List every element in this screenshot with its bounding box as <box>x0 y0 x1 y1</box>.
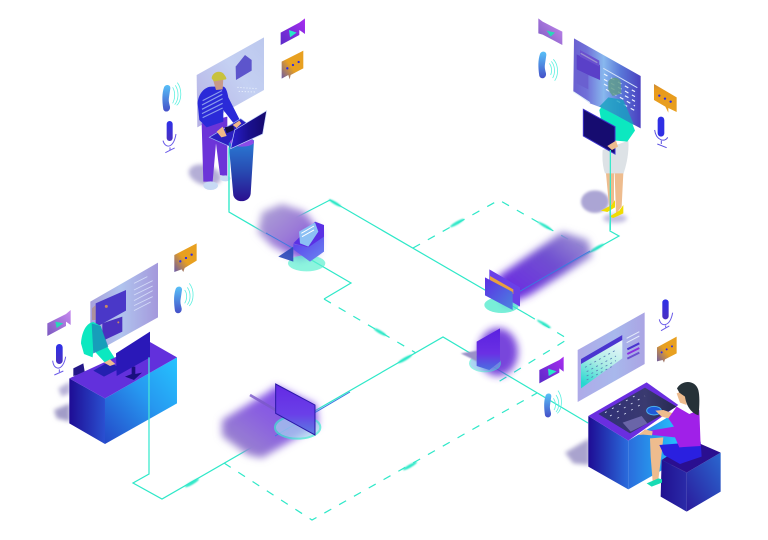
laptop base <box>209 119 254 147</box>
panel text lines <box>581 53 597 63</box>
torso <box>599 97 635 142</box>
blouse <box>651 407 701 447</box>
data line <box>147 357 151 450</box>
torso <box>81 322 116 363</box>
floor shadow <box>565 438 589 465</box>
panel text lines <box>134 277 153 311</box>
shoe <box>647 478 662 487</box>
torso under panel <box>599 97 634 125</box>
microphone icon <box>56 344 63 364</box>
keys <box>605 394 645 418</box>
skirt <box>602 141 629 174</box>
skirt <box>659 442 702 464</box>
base disc <box>470 355 500 372</box>
head <box>92 305 96 320</box>
torso <box>198 87 241 127</box>
station: woman with tablet <box>538 18 677 230</box>
video icon <box>281 18 305 45</box>
hand <box>104 359 115 366</box>
desk top <box>588 382 678 441</box>
station: worker at desk with monitor <box>47 243 197 450</box>
laptop screen <box>231 111 267 149</box>
control surface <box>598 388 677 433</box>
display panel <box>197 37 264 127</box>
data line <box>609 150 612 230</box>
torso under panel <box>92 323 108 353</box>
face <box>677 390 687 405</box>
floor shadow <box>58 382 70 397</box>
near hand <box>638 429 653 435</box>
chat icon <box>174 243 197 272</box>
microphone icon <box>167 121 173 141</box>
monitor screen <box>116 332 150 376</box>
leg <box>650 437 663 482</box>
display panel <box>578 312 645 402</box>
shadow stem <box>461 351 477 362</box>
station: woman at control desk <box>539 299 721 512</box>
house icon <box>236 55 252 80</box>
phone icon <box>538 52 546 78</box>
legs <box>606 173 623 214</box>
phone icon <box>162 85 170 112</box>
node: small screen <box>461 328 500 372</box>
podium <box>229 138 254 201</box>
node: monitor <box>250 384 320 439</box>
panel dots <box>237 87 257 92</box>
panel cards <box>96 290 126 327</box>
shirt stripes <box>202 91 223 118</box>
phone icon <box>174 287 182 313</box>
wedge <box>278 247 293 262</box>
podium top <box>230 137 254 147</box>
shoes <box>601 200 623 218</box>
head <box>608 78 621 96</box>
desk left face <box>588 416 628 489</box>
back sheet <box>489 269 520 307</box>
seat left face <box>661 460 687 512</box>
microphone icon <box>662 299 669 319</box>
panel header <box>581 335 622 364</box>
seat right face <box>687 453 721 512</box>
connector lines <box>133 150 619 520</box>
node: folder <box>484 269 520 313</box>
box body <box>293 237 324 262</box>
back flap <box>293 222 324 252</box>
microphone icon <box>658 117 664 137</box>
chat icon <box>282 51 303 79</box>
dial <box>647 406 661 415</box>
motion trail: monitor <box>222 386 318 458</box>
panel side list <box>627 332 639 343</box>
data pulse highlights <box>184 198 605 488</box>
shoes <box>203 181 218 190</box>
chat icon <box>654 84 677 113</box>
motion trail: folder <box>497 232 592 306</box>
station: presenter at podium <box>162 18 305 210</box>
display panel <box>90 263 158 355</box>
node: mailbox <box>278 222 325 271</box>
keyboard <box>93 361 120 377</box>
chat icon <box>657 337 677 363</box>
data line <box>227 147 231 210</box>
floor shadow <box>186 161 224 189</box>
desk top <box>69 342 177 398</box>
touchpad <box>623 416 647 432</box>
video icon <box>47 310 71 336</box>
floor shadow <box>581 190 609 213</box>
seat top <box>662 440 721 473</box>
base disc <box>484 297 519 313</box>
panel cards <box>577 54 600 80</box>
motion trail: mail <box>258 204 320 260</box>
head <box>213 78 223 90</box>
base disc <box>288 255 325 271</box>
far arm <box>655 410 675 420</box>
hair <box>677 382 699 415</box>
desk right face <box>105 357 177 444</box>
chair <box>73 363 85 376</box>
video icon <box>538 18 562 45</box>
stem shadow <box>250 395 276 410</box>
display panel <box>573 38 641 128</box>
panel data rows <box>585 350 616 380</box>
legs <box>202 117 227 182</box>
orange paper <box>490 276 513 294</box>
folder front <box>485 277 513 310</box>
desk right face <box>628 410 680 489</box>
desk left face <box>69 378 105 444</box>
video icon <box>539 357 564 383</box>
screen <box>477 328 500 370</box>
hair <box>212 72 226 81</box>
base disc <box>275 416 320 439</box>
tinted connector segments over trails <box>266 233 590 436</box>
hand <box>607 141 618 150</box>
motion trail: small screen <box>478 328 518 376</box>
monitor stand <box>125 367 142 380</box>
phone icon <box>544 393 551 417</box>
screen <box>276 384 315 435</box>
tablet <box>583 109 615 154</box>
document <box>299 222 318 247</box>
hands <box>217 121 241 137</box>
panel screen <box>581 335 622 388</box>
